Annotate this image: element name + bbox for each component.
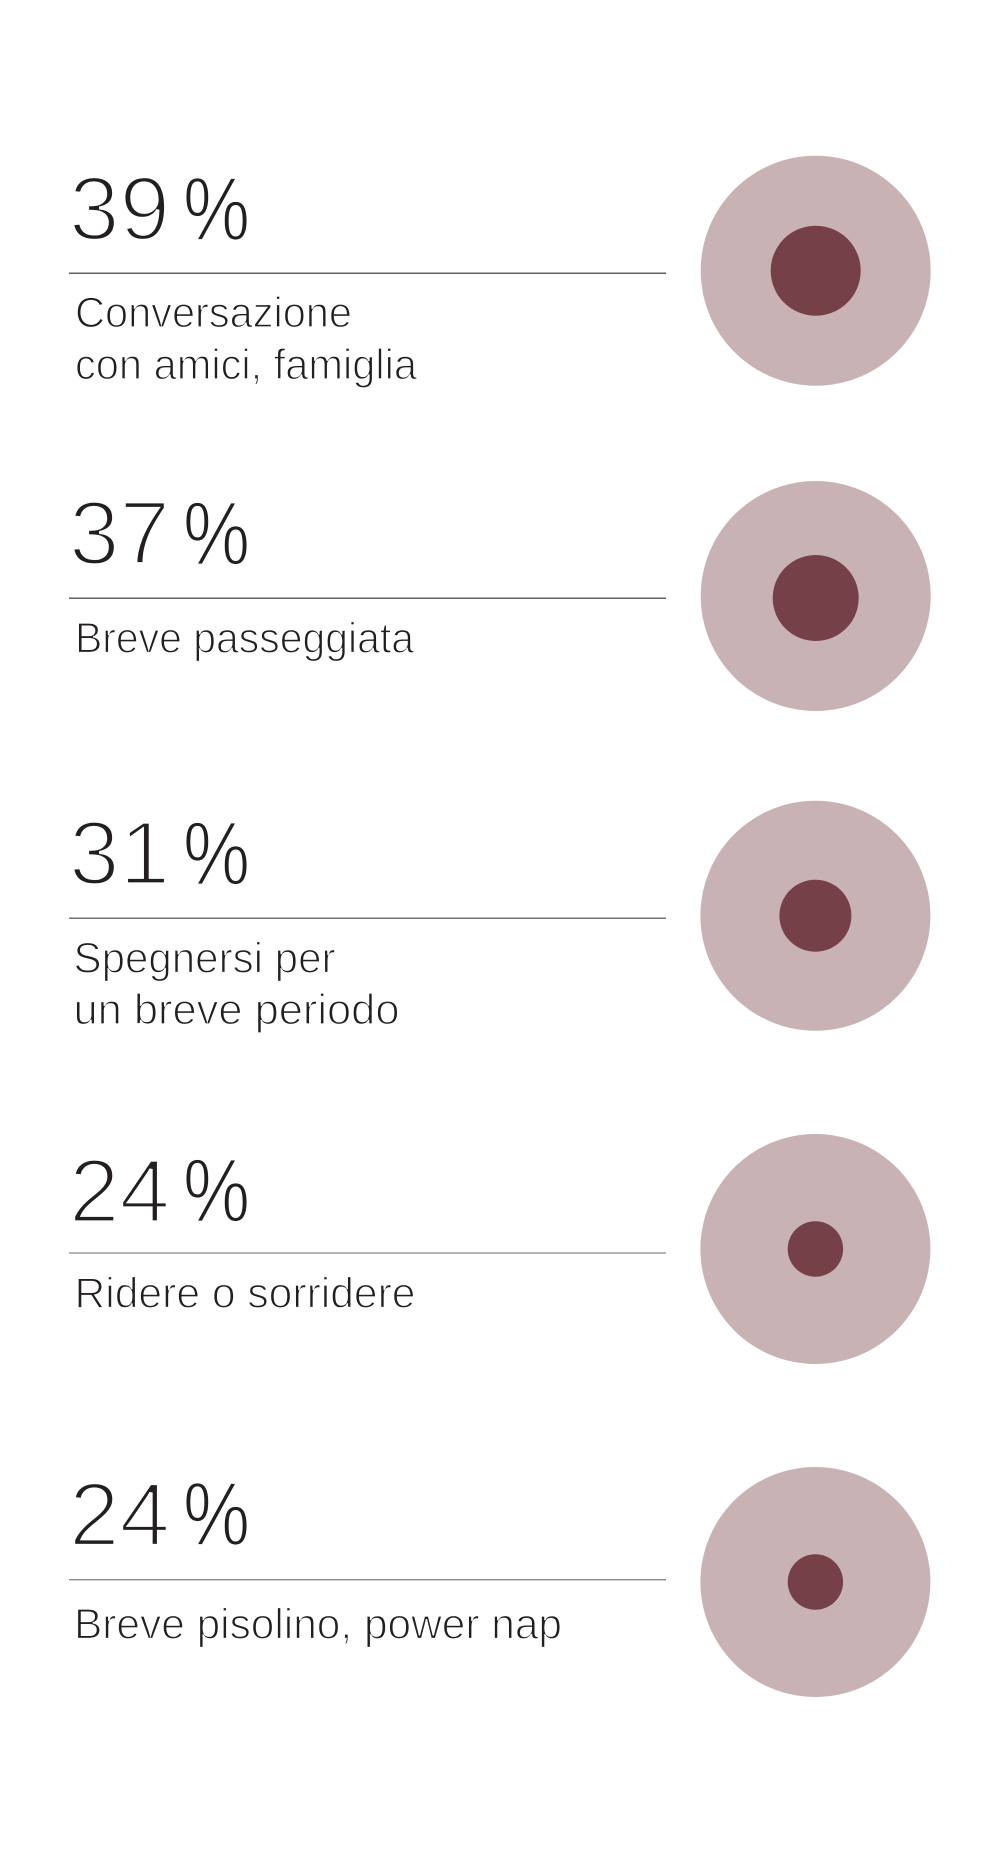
percentage: 24% (69, 1142, 250, 1242)
label: conversation: Conversazione (75, 289, 352, 337)
percentage: 39%: % (183, 160, 250, 260)
circle chart: 31% (700, 801, 930, 1031)
label: laughing: Ridere o sorridere (74, 1270, 416, 1318)
percentage: 24%: % (183, 1465, 250, 1565)
percentage: 24% (69, 1465, 250, 1566)
label: conversation (75, 289, 417, 389)
circle chart: 37% (701, 481, 931, 711)
label: switching off: Spegnersi per (74, 935, 336, 983)
row: 37% short walk (69, 481, 931, 711)
percentage: 24%: 24 (69, 1142, 170, 1242)
circle chart: 39% (701, 156, 931, 386)
row: 24% power nap (69, 1465, 930, 1697)
percentage: 37%: % (183, 485, 250, 585)
row: 24% laughing (69, 1134, 930, 1364)
percentage: 31% (69, 804, 250, 905)
percentage: 39% (69, 160, 250, 260)
label: conversation: con amici, famiglia (75, 341, 417, 389)
percentage: 37% (69, 484, 250, 585)
row: 31% switching off (69, 801, 930, 1034)
circle chart: 24% (700, 1134, 930, 1364)
row: 39% conversation (69, 156, 931, 389)
percentage: 31%: % (183, 805, 250, 905)
label: power nap: Breve pisolino, power nap (74, 1601, 562, 1649)
percentage: 37%: 37 (69, 484, 170, 584)
label: switching off: un breve periodo (74, 986, 400, 1034)
percentage: 24%: % (183, 1142, 250, 1242)
label: short walk: Breve passeggiata (75, 615, 414, 663)
circle chart: 24% (700, 1467, 930, 1697)
percentage: 39%: 39 (69, 160, 170, 260)
percentage: 24%: 24 (69, 1466, 170, 1566)
label: switching off (74, 935, 400, 1034)
percentage: 31%: 31 (69, 804, 170, 904)
